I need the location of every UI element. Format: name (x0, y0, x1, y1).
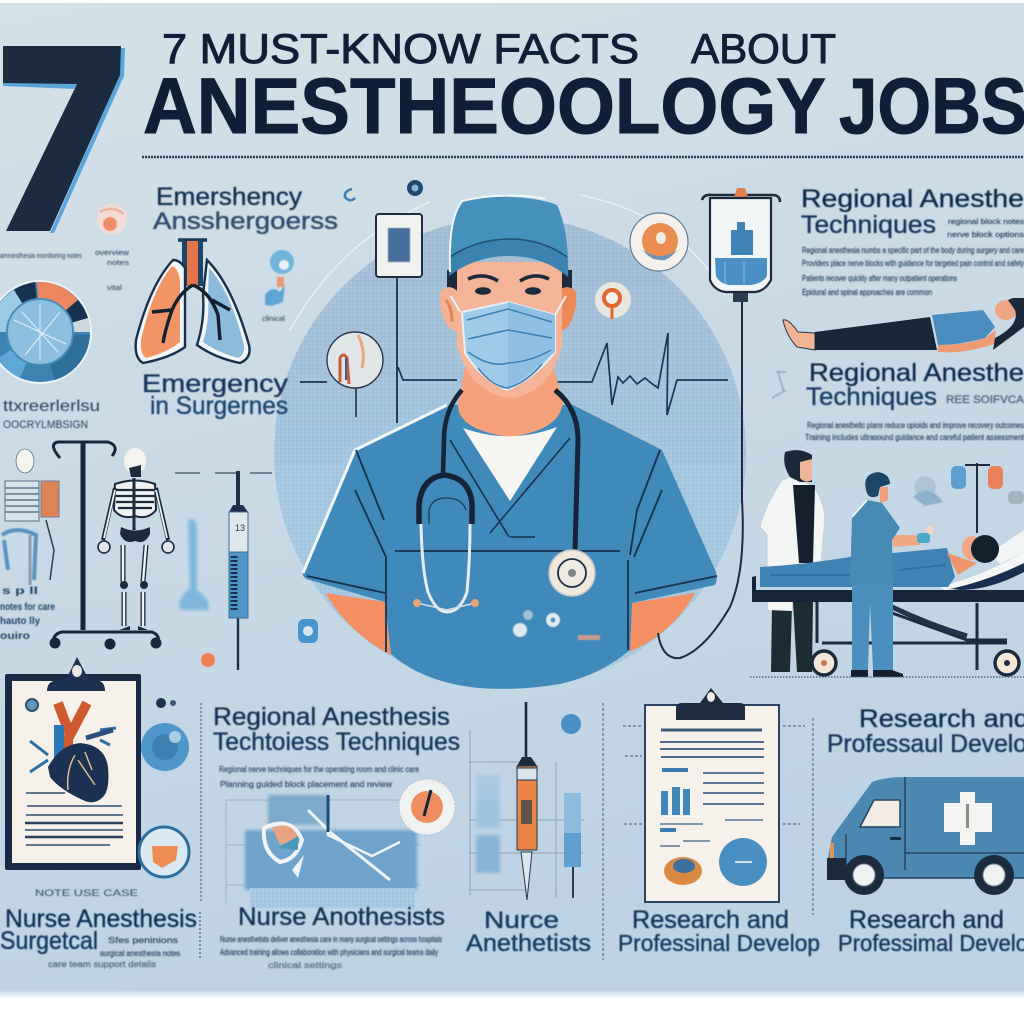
text block: regional anesthesia second (805, 394, 1024, 442)
icon: IV line (658, 302, 743, 658)
section label: research bottom centre: Professinal Develop (618, 930, 820, 956)
caption: beneath clipboard: NOTE USE CASE (35, 888, 138, 898)
panel: syringes chart (469, 702, 584, 900)
icon: monitor panel (376, 214, 422, 423)
clip (676, 688, 745, 720)
section label: nurse anesthetists narrow: Anethetists (466, 930, 591, 957)
text block: regional anesthesia top: regional block notes (948, 219, 1024, 226)
section label: nurse anesthetists middle: Nurse Anothesists (238, 903, 445, 931)
small caption beside numeral: amnesthesia monitoring notes (0, 253, 82, 260)
caption: left column: ttxreerlerlsu (3, 398, 100, 415)
text block: regional anesthesia top: nerve block options (947, 232, 1024, 239)
section label: research bottom centre (618, 906, 820, 956)
section label: nurse anesthetists narrow (466, 907, 591, 957)
section label: regional anesthesia second: Techniques (806, 383, 937, 411)
stethoscope chestpiece (549, 550, 595, 596)
large numeral 7 (3, 46, 125, 233)
section label: research top right (827, 705, 1024, 758)
caption: lower left fragments: ouiro (0, 631, 30, 642)
icon: lungs (136, 240, 250, 363)
section label: regional anesthesia top right: Techniques (801, 211, 936, 239)
surgical mask (462, 302, 555, 390)
ECG trace (300, 333, 728, 415)
caption: lower left fragments (0, 586, 55, 642)
face (457, 262, 562, 398)
small caption beside numeral: notes (107, 260, 130, 267)
icon: blue bottle silhouette (179, 519, 209, 610)
sleeve seams (307, 450, 717, 652)
background IV stand (913, 463, 1024, 533)
text block: regional anesthesia top: Epidural and spinal approaches are common (802, 288, 932, 297)
neck and undershirt (458, 367, 563, 437)
text block: regional caption: Regional nerve techniques for the operating room and clinic care (219, 765, 419, 774)
section label: research top right: Professaul Develo (827, 730, 1024, 758)
icon: ambulance (827, 777, 1024, 895)
stethoscope (417, 390, 578, 612)
section label: regional anesthesia second: Regional Anesthe (809, 359, 1024, 387)
heart illustration (30, 703, 116, 802)
section label: regional anesthesia bottom: Techtoiess Techniques (213, 728, 460, 756)
pocket badge (513, 610, 600, 640)
small caption beside numeral (0, 250, 285, 323)
text block: surgical notes: Sfes peninions (108, 936, 178, 945)
section label: emergency anesthesia (153, 183, 338, 235)
section label: nurse anesthetists narrow: Nurce (484, 907, 559, 934)
text block: regional caption (219, 765, 419, 789)
text block: nurse anesthetists: Nurse anesthetists deliver anesthesia care in many surgical settings across hospitals (220, 935, 442, 944)
section label: regional anesthesia second (806, 359, 1024, 411)
title (143, 25, 1024, 150)
small caption beside numeral: overview (95, 250, 130, 257)
bar chart (661, 787, 690, 815)
panel: heart clipboard (5, 657, 141, 870)
panel: research clipboard (645, 688, 779, 902)
text block: nurse anesthetists: Advanced training allows collaboration with physicians and surgical teams daily (220, 948, 438, 957)
section label: emergency in surgeries: Emergency (142, 370, 289, 398)
text block: surgical notes: care team support details (48, 960, 156, 969)
eyes (468, 276, 549, 281)
icon: blue decoration (265, 250, 294, 306)
icon: IV bag (702, 188, 780, 302)
nurse arms (325, 593, 695, 655)
icon: syringe column (175, 471, 272, 670)
text block: regional anesthesia top: Patients recover quickly after many outpatient operations (802, 274, 957, 283)
icon: syringe column: 13 (235, 523, 245, 533)
section label: nurse anesthetists left: Nurse Anesthesis (5, 905, 197, 933)
caption: left column (3, 398, 100, 431)
central nurse figure (303, 195, 717, 689)
text block: surgical notes (48, 936, 180, 969)
doctor (760, 450, 825, 672)
nurse scrubs (303, 405, 717, 689)
ear loops (451, 296, 566, 315)
icon: reclining patient (783, 298, 1024, 352)
clipboard clip (47, 657, 105, 691)
syringe: blue (564, 770, 581, 898)
small dots (201, 619, 318, 667)
icon: vitals wheel (0, 280, 92, 384)
section label: nurse anesthetists left: Surgetcal (0, 927, 98, 955)
text block: regional anesthesia top (802, 219, 1024, 297)
text block: regional caption: Planning guided block placement and review (220, 780, 392, 789)
caption: lower left fragments: hauto lly (0, 616, 40, 627)
icon: gauge (399, 779, 455, 835)
bed (752, 530, 1024, 675)
section label: regional anesthesia top right (801, 185, 1024, 239)
scene: care team and patient (750, 450, 1024, 677)
text block: regional anesthesia second: REE SOIFVCA (946, 394, 1024, 406)
section label: emergency in surgeries (142, 370, 289, 420)
clipboard text lines (25, 793, 123, 845)
small caption beside numeral: clinical (262, 316, 285, 323)
text block: nurse anesthetists (220, 935, 442, 970)
section label: emergency anesthesia: Emershency (156, 183, 303, 211)
small round icons around nurse (327, 180, 688, 417)
title: 7 MUST-KNOW FACTS (162, 25, 639, 72)
panel: nerve block illustration (226, 795, 420, 908)
chart grid (469, 730, 584, 898)
hair (447, 270, 572, 300)
syringe: orange (517, 702, 537, 900)
icon: side skeleton with chart (2, 449, 59, 585)
icon: front skeleton (98, 448, 174, 630)
caption: lower left fragments: notes for care (0, 602, 55, 613)
text block: surgical notes: surgical anesthesia notes (100, 949, 180, 958)
divider dotted (603, 703, 813, 960)
section label: regional anesthesia top right: Regional Anesthe (801, 185, 1024, 213)
caption: left column: OOCRYLMBSIGN (3, 419, 88, 431)
icons beside clipboard (26, 698, 189, 877)
text block: nurse anesthetists: clinical settings (268, 961, 342, 970)
section label: regional anesthesia bottom (213, 703, 460, 756)
icon: IV stand (51, 442, 160, 648)
title: ABOUT (691, 25, 836, 72)
central circle backdrop (274, 195, 746, 689)
section label: regional anesthesia bottom: Regional Anesthesis (213, 703, 450, 731)
clipboard board (5, 674, 141, 870)
section label: research bottom centre: Research and (632, 906, 789, 934)
section label: research top right: Research and (859, 705, 1024, 733)
section label: emergency in surgeries: in Surgernes (150, 392, 288, 420)
section label: emergency anesthesia: Ansshergoerss (153, 208, 338, 235)
small mark near IV (772, 372, 786, 398)
divider dotted (200, 703, 201, 958)
ears (440, 287, 458, 332)
section label: research bottom right: Research and (849, 906, 1004, 934)
surgical cap (449, 197, 568, 277)
icon: brain (97, 204, 127, 234)
small caption beside numeral: vital (107, 285, 123, 292)
section label: research bottom right (838, 906, 1024, 956)
pie icon (664, 857, 702, 885)
report lines (661, 728, 762, 732)
caption: lower left fragments: s p ll (2, 586, 38, 597)
scrubs nurse (850, 472, 934, 677)
title: ANESTHEOOLOGY (143, 61, 826, 150)
section label: nurse anesthetists left (0, 905, 197, 955)
